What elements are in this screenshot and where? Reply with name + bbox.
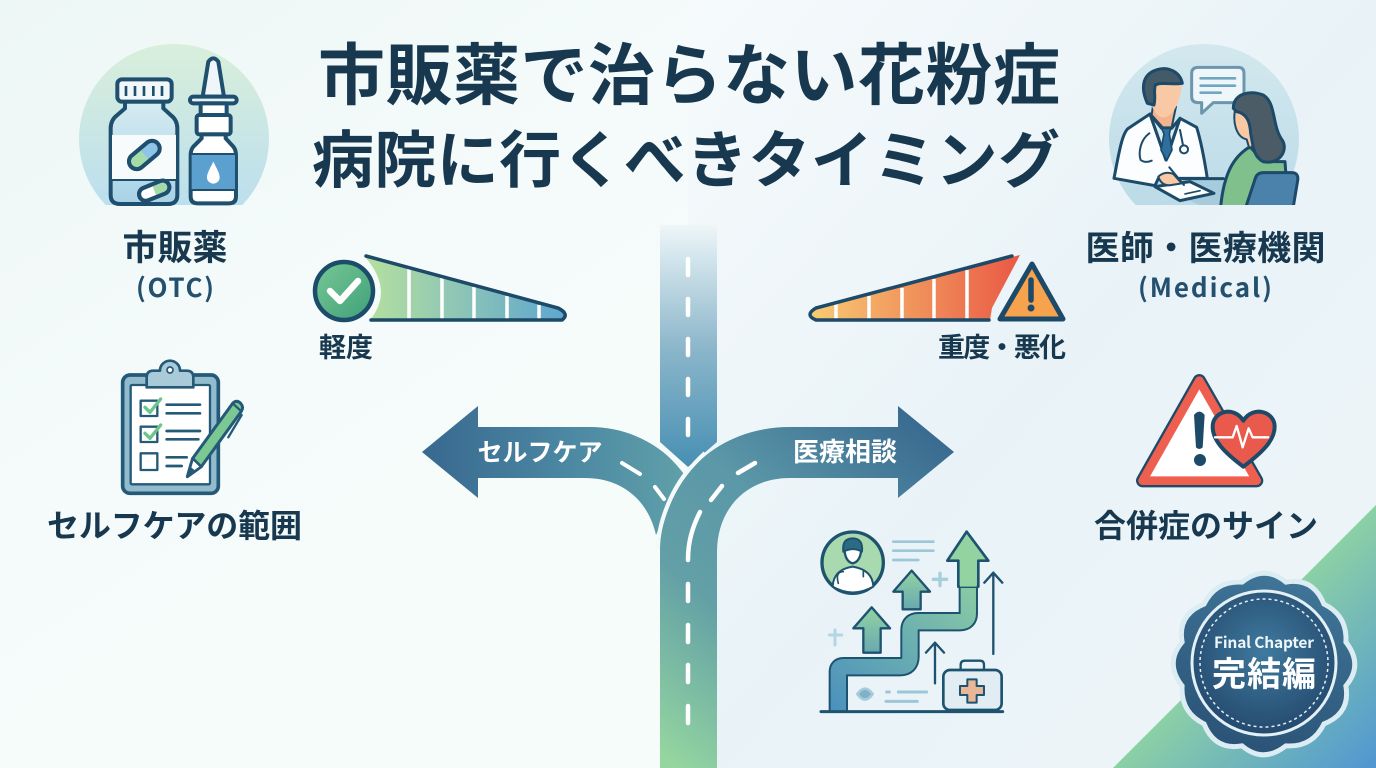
- gauge: severe: [810, 255, 1063, 320]
- icon: warning triangle: [1000, 264, 1063, 319]
- label: Medical: [1086, 230, 1326, 305]
- icon: warning with heart: [1143, 381, 1275, 481]
- arrow: self care branch: [422, 406, 685, 535]
- icon: clipboard checklist: [123, 361, 243, 493]
- label: severe: 重度・悪化: [938, 333, 1066, 363]
- badge: final chapter: [1155, 555, 1373, 768]
- icon: check mark: [315, 262, 373, 320]
- icon: escalation path: [821, 532, 1003, 712]
- label: Medical: (Medical): [1138, 268, 1272, 305]
- icon: doctor consultation: [1109, 44, 1299, 207]
- label: complication signs: 合併症のサイン: [1094, 508, 1318, 544]
- label: OTC: (OTC): [136, 268, 214, 305]
- icon: OTC medicine bottle and nasal spray: [79, 44, 269, 205]
- label: OTC: 市販薬: [122, 229, 228, 268]
- badge: final chapter: Final Chapter: [1214, 631, 1314, 653]
- label: Medical: 医師・医療機関: [1086, 230, 1326, 268]
- label: mild: 軽度: [319, 333, 373, 363]
- label: self care scope: セルフケアの範囲: [47, 508, 302, 544]
- arrow: medical consultation branch: 医療相談: [793, 437, 897, 467]
- title: [312, 39, 1060, 196]
- title: 市販薬で治らない花粉症: [318, 39, 1060, 114]
- arrow: self care branch: セルフケア: [478, 439, 602, 467]
- arrow: medical consultation branch: [658, 406, 954, 768]
- corner accent triangle: [1113, 505, 1376, 768]
- title: 病院に行くべきタイミング: [312, 127, 1060, 196]
- gauge: mild: [315, 256, 565, 320]
- label: OTC: [122, 229, 228, 305]
- road: central trunk: [660, 225, 717, 467]
- badge: final chapter: 完結編: [1212, 647, 1316, 696]
